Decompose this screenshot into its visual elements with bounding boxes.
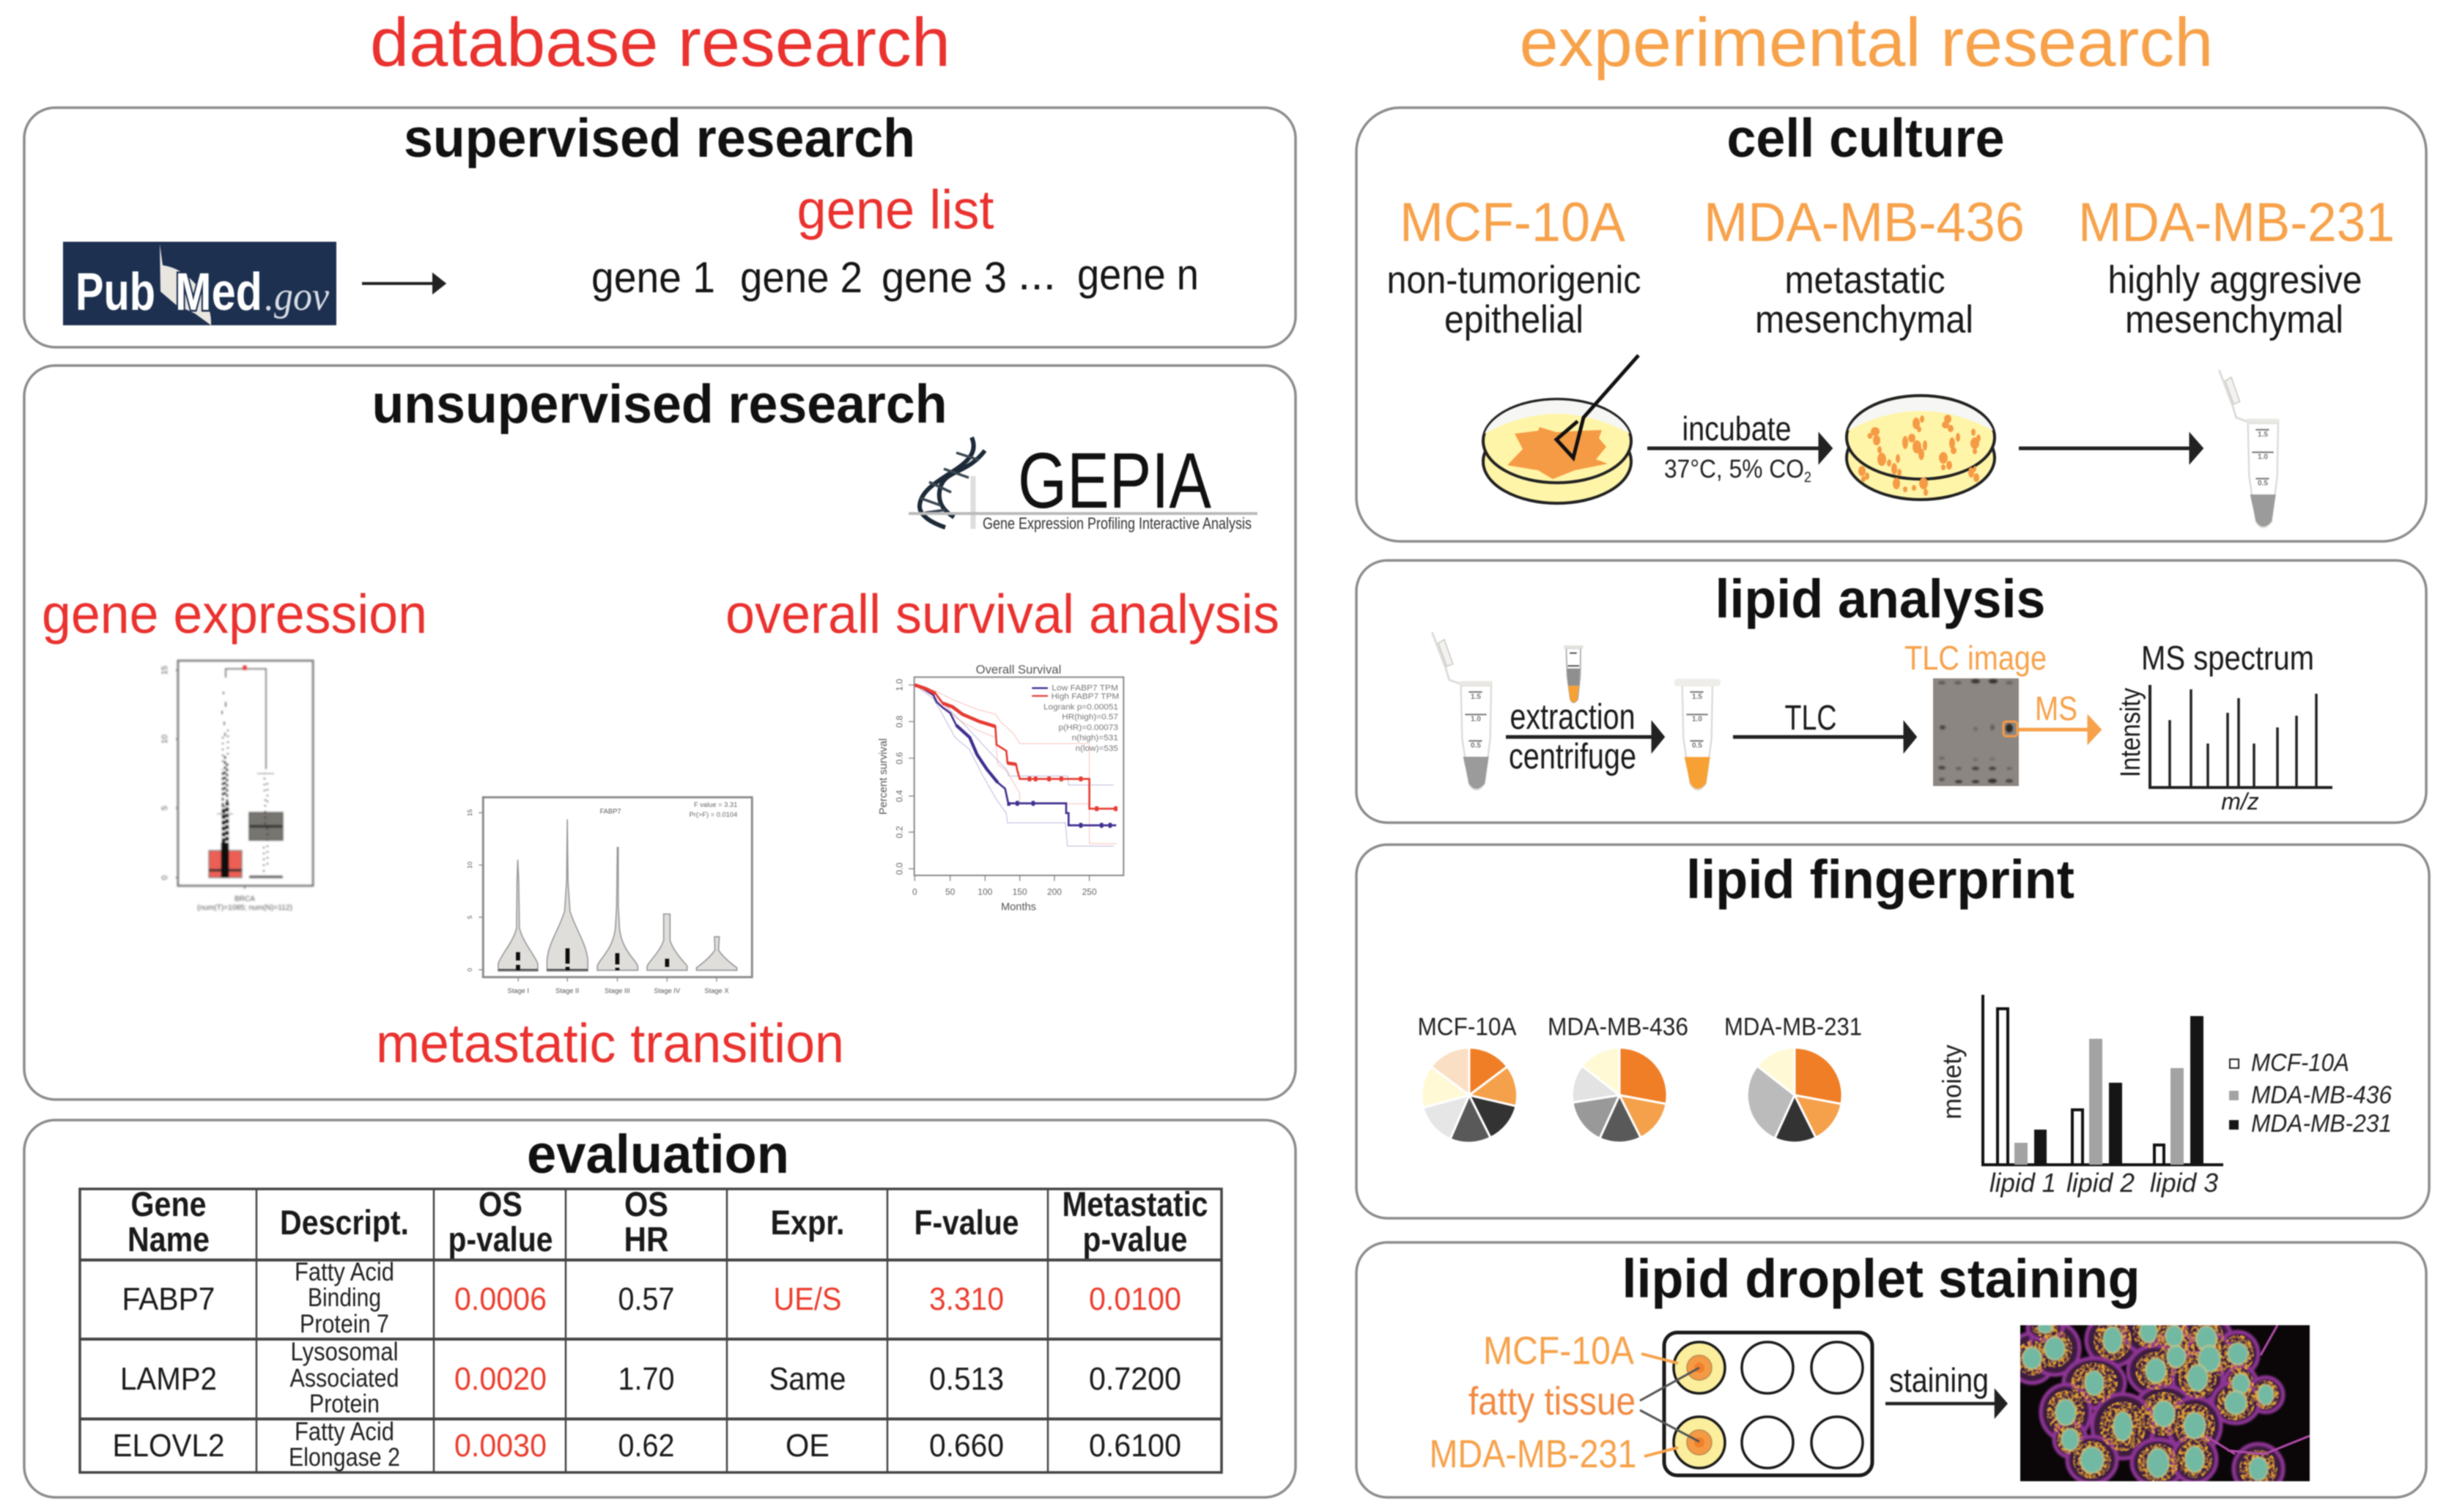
icon: open sample tube (1432, 632, 1493, 790)
table: gene evaluation: Fatty Acid (295, 1418, 394, 1446)
pie chart: MDA-MB-436 (1548, 1013, 1688, 1143)
arrow: TLC (1733, 725, 1915, 749)
icon: open sample tube: 1.5 (1471, 693, 1481, 701)
table: gene evaluation: 0.513 (929, 1361, 1004, 1397)
label: MCF-10A: MCF-10A (1483, 1329, 1634, 1373)
table: gene evaluation: F-value (915, 1203, 1019, 1242)
label: MDA-MB-231: MDA-MB-231 (1429, 1432, 1637, 1476)
panel: lipid analysis (1356, 560, 2426, 823)
table: gene evaluation: LAMP2 (120, 1361, 217, 1397)
column: MCF-10A (1386, 191, 1641, 341)
chart: overall survival Kaplan-Meier: 200 (1047, 887, 1062, 897)
table: gene evaluation: 3.310 (929, 1281, 1004, 1317)
icon: closed tube with orange lipid extract: 1.5 (1692, 693, 1702, 701)
gene list items: gene 3 (882, 253, 1007, 302)
chart: overall survival Kaplan-Meier: 250 (1082, 887, 1097, 897)
gene list items (591, 251, 1199, 302)
column: MDA-MB-231: highly aggresive (2107, 259, 2362, 302)
icon: collection tube: 0.5 (2258, 480, 2268, 488)
table: gene evaluation: OE (786, 1428, 830, 1464)
label: TLC: TLC (1785, 699, 1836, 738)
chart: stage violin plot: Stage II (555, 987, 579, 995)
column: MDA-MB-231: MDA-MB-231 (2078, 191, 2395, 253)
chart: overall survival Kaplan-Meier: 150 (1013, 887, 1027, 897)
logo: GEPIA (909, 436, 1257, 533)
table: gene evaluation: Binding (308, 1283, 381, 1312)
column: MCF-10A: MCF-10A (1400, 191, 1625, 253)
label: centrifuge: centrifuge (1509, 737, 1636, 777)
heading: gene list: gene list (797, 179, 994, 240)
table: gene evaluation: Elongase 2 (289, 1443, 400, 1472)
chart: overall survival Kaplan-Meier: 100 (978, 887, 993, 897)
table: gene evaluation: 0.57 (618, 1281, 674, 1317)
table: gene evaluation: HR (624, 1220, 668, 1259)
column: MDA-MB-436: mesenchymal (1755, 298, 1973, 341)
pie chart: MCF-10A: MCF-10A (1417, 1013, 1517, 1041)
chart: expression box plot (160, 661, 313, 912)
column: MCF-10A: non-tumorigenic (1386, 259, 1641, 302)
chart: stage violin plot: Stage III (605, 987, 630, 995)
arrow: dish to tube (2019, 437, 2201, 460)
panel: evaluation (24, 1120, 1296, 1497)
image: TLC plate (1933, 678, 2019, 786)
chart: overall survival Kaplan-Meier: High FABP7 TPM (1052, 692, 1119, 701)
column: MDA-MB-231 (2078, 191, 2395, 341)
chart: stage violin plot: 15 (466, 809, 473, 816)
pie chart: MCF-10A (1417, 1013, 1518, 1143)
chart: overall survival Kaplan-Meier: n(low)=535 (1076, 744, 1118, 753)
heading: lipid fingerprint: lipid fingerprint (1686, 849, 2074, 910)
table: gene evaluation: 0.660 (929, 1428, 1004, 1464)
table: gene evaluation: Gene (130, 1185, 207, 1223)
arrow: PubMed to gene list (362, 275, 444, 292)
chart: overall survival Kaplan-Meier: 50 (945, 887, 956, 897)
heading: unsupervised research: unsupervised research (372, 374, 947, 434)
bar chart: lipid moiety: lipid 3 (2150, 1168, 2218, 1198)
table: gene evaluation: p-value (448, 1220, 553, 1259)
column: MCF-10A: epithelial (1444, 298, 1584, 341)
table: gene evaluation: OS (479, 1185, 522, 1223)
column: MDA-MB-436: MDA-MB-436 (1704, 191, 2025, 253)
chart: overall survival Kaplan-Meier: HR(high)=0.57 (1062, 713, 1118, 722)
icon: PubMed logo: Med (175, 263, 262, 322)
bar chart: lipid moiety: lipid 1 (1989, 1168, 2056, 1198)
title: experimental research: experimental research (1520, 4, 2213, 81)
panel: lipid fingerprint (1356, 845, 2429, 1218)
chart: expression box plot: 10 (160, 735, 169, 744)
heading: supervised research: supervised research (404, 108, 915, 168)
table: gene evaluation: UE/S (774, 1281, 841, 1317)
panel: unsupervised research (24, 366, 1296, 1100)
chart: overall survival Kaplan-Meier: p(HR)=0.00073 (1059, 724, 1118, 733)
icon: closed tube with orange lipid extract (1674, 679, 1721, 790)
label: extraction: extraction (1510, 697, 1636, 737)
chart: stage violin plot: 10 (466, 861, 473, 869)
label: incubation conditions: 37°C, 5% CO (1664, 455, 1818, 483)
table: gene evaluation: Same (769, 1361, 846, 1397)
heading: cell culture: cell culture (1726, 108, 2005, 168)
chart: stage violin plot: Stage IV (654, 987, 681, 995)
table: gene evaluation: 0.62 (618, 1428, 674, 1464)
table: gene evaluation: Name (128, 1220, 210, 1259)
chart: overall survival Kaplan-Meier: Overall Survival (976, 662, 1061, 676)
heading: evaluation: evaluation (527, 1124, 789, 1185)
chart: expression box plot: BRCA (234, 895, 255, 903)
bar chart: lipid moiety: moiety (1937, 1045, 1967, 1119)
chart: overall survival Kaplan-Meier: Low FABP7 TPM (1052, 684, 1118, 693)
logo: GEPIA: GEPIA (1018, 436, 1211, 525)
arrow: MS (2019, 719, 2099, 741)
label: gene expression: gene expression (42, 583, 427, 645)
icon: open sample tube: 0.5 (1471, 742, 1481, 750)
table: gene evaluation: 1.70 (618, 1361, 674, 1397)
chart: overall survival Kaplan-Meier: 0.0 (895, 862, 905, 875)
table: gene evaluation: 0.0006 (454, 1281, 547, 1317)
icon: PubMed logo: Pub (75, 263, 155, 322)
label: incubate: incubate (1682, 410, 1791, 448)
table: gene evaluation: FABP7 (122, 1281, 215, 1317)
chart: overall survival Kaplan-Meier: 0 (912, 887, 917, 897)
icon: PubMed logo (63, 242, 336, 325)
pie chart: MDA-MB-231 (1724, 1013, 1862, 1143)
chart: overall survival Kaplan-Meier: Percent survival (878, 738, 890, 815)
arrow: incubate (1647, 437, 1830, 460)
legend: MDA-MB-231 (2251, 1110, 2392, 1138)
label: MS spectrum: MS spectrum (2141, 639, 2314, 677)
table: gene evaluation: Lysosomal (290, 1338, 399, 1366)
chart: stage violin plot: Stage X (704, 987, 729, 995)
chart: stage violin plot: 5 (466, 915, 473, 919)
table: gene evaluation: p-value (1083, 1220, 1187, 1259)
table: gene evaluation: OS (624, 1185, 668, 1223)
column: MDA-MB-231: mesenchymal (2125, 298, 2343, 341)
table: gene evaluation: Protein (309, 1390, 380, 1418)
chart: overall survival Kaplan-Meier: Logrank p=0.00051 (1043, 703, 1118, 711)
gene list items: gene 2 (740, 253, 862, 302)
chart: overall survival Kaplan-Meier: 0.2 (895, 826, 905, 838)
legend (2229, 1049, 2392, 1138)
arrow: extraction (1506, 725, 1663, 749)
icon: collection tube (2219, 370, 2280, 527)
table: gene evaluation: Associated (290, 1364, 399, 1393)
heading: lipid analysis: lipid analysis (1715, 568, 2046, 629)
chart: stage violin plot: Stage I (507, 987, 529, 995)
table: gene evaluation: 0.0030 (454, 1428, 547, 1464)
chart: MS spectrum: m/z (2221, 788, 2259, 815)
label: MS: MS (2035, 689, 2077, 727)
table: gene evaluation: 0.6100 (1089, 1428, 1181, 1464)
chart: MS spectrum (2116, 685, 2332, 815)
icon: petri dish with tissue and forceps (1483, 355, 1638, 503)
chart: overall survival Kaplan-Meier: 0.4 (895, 790, 905, 802)
table: gene evaluation: 0.0020 (454, 1361, 547, 1397)
label: TLC image: TLC image (1904, 639, 2047, 677)
chart: overall survival Kaplan-Meier (878, 662, 1123, 914)
icon: collection tube: 1.0 (2258, 453, 2268, 462)
pie chart: MDA-MB-436: MDA-MB-436 (1548, 1013, 1688, 1041)
chart: stage violin plot: F value = 3.31 (694, 801, 737, 809)
panel: supervised research (24, 108, 1296, 347)
chart: stage violin plot: FABP7 (600, 808, 621, 815)
heading: lipid droplet staining: lipid droplet staining (1622, 1248, 2140, 1309)
icon: closed tube with orange lipid extract: 1.0 (1692, 716, 1702, 724)
panel: cell culture (1356, 108, 2426, 541)
table: gene evaluation: Descript. (280, 1203, 409, 1242)
table: gene evaluation: Metastatic (1063, 1185, 1208, 1223)
chart: MS spectrum: Intensity (2116, 688, 2146, 777)
legend: MCF-10A (2251, 1049, 2349, 1077)
icon: six-well plate (1664, 1333, 1872, 1475)
title: database research: database research (370, 4, 950, 81)
table: gene evaluation: Protein 7 (300, 1310, 389, 1338)
table: gene evaluation (80, 1185, 1222, 1472)
label: overall survival analysis: overall survival analysis (725, 583, 1279, 645)
table: gene evaluation: 0.7200 (1089, 1361, 1181, 1397)
chart: overall survival Kaplan-Meier: n(high)=531 (1072, 734, 1118, 743)
table: gene evaluation: 0.0100 (1089, 1281, 1181, 1317)
connectors: labels to wells (1640, 1368, 1699, 1442)
table: gene evaluation: Expr. (771, 1203, 844, 1242)
icon: petri dish with cell colonies (1847, 396, 1995, 500)
icon: small tube with orange extract (1564, 645, 1583, 703)
label: incubation conditions: 2 (1804, 470, 1811, 486)
label: metastatic transition: metastatic transition (376, 1012, 844, 1074)
column: MDA-MB-436: metastatic (1785, 259, 1945, 302)
chart: stage violin plot (466, 797, 752, 995)
chart: expression box plot: (num(T)=1085; num(N)=112) (197, 904, 292, 912)
gene list items: gene 1 (591, 253, 715, 302)
bar chart: lipid moiety (1937, 995, 2223, 1198)
chart: expression box plot: 0 (160, 875, 169, 880)
panel: lipid droplet staining (1356, 1242, 2426, 1497)
chart: overall survival Kaplan-Meier: 0.6 (895, 752, 905, 764)
label: fatty tissue: fatty tissue (1468, 1379, 1636, 1423)
icon: collection tube: 1.5 (2258, 431, 2268, 439)
chart: expression box plot: 15 (160, 666, 169, 675)
chart: overall survival Kaplan-Meier: 1.0 (895, 678, 905, 691)
chart: expression box plot: 5 (160, 806, 169, 810)
label: staining: staining (1889, 1361, 1989, 1399)
image: fluorescence microscopy of stained cells (2020, 1324, 2311, 1483)
connectors: cell line labels (1641, 1354, 1678, 1456)
chart: overall survival Kaplan-Meier: 0.8 (895, 715, 905, 727)
pie chart: MDA-MB-231: MDA-MB-231 (1724, 1013, 1862, 1041)
legend: MDA-MB-436 (2251, 1081, 2392, 1109)
icon: PubMed logo: .gov (265, 274, 329, 319)
gene list items: ... (1018, 251, 1056, 299)
highlight: selected TLC band (2003, 722, 2017, 736)
icon: open sample tube: 1.0 (1471, 716, 1481, 724)
icon: closed tube with orange lipid extract: 0.5 (1692, 742, 1702, 750)
chart: stage violin plot: Pr(>F) = 0.0104 (690, 811, 737, 818)
chart: stage violin plot: 0 (466, 968, 473, 971)
column: MDA-MB-436 (1704, 191, 2025, 341)
table: gene evaluation: Fatty Acid (295, 1258, 394, 1286)
chart: overall survival Kaplan-Meier: Months (1001, 902, 1036, 914)
logo: GEPIA: Gene Expression Profiling Interactive Analysis (983, 514, 1252, 533)
gene list items: gene n (1077, 251, 1199, 299)
bar chart: lipid moiety: lipid 2 (2066, 1168, 2135, 1198)
arrow: staining (1885, 1393, 2006, 1415)
table: gene evaluation: ELOVL2 (113, 1428, 224, 1464)
